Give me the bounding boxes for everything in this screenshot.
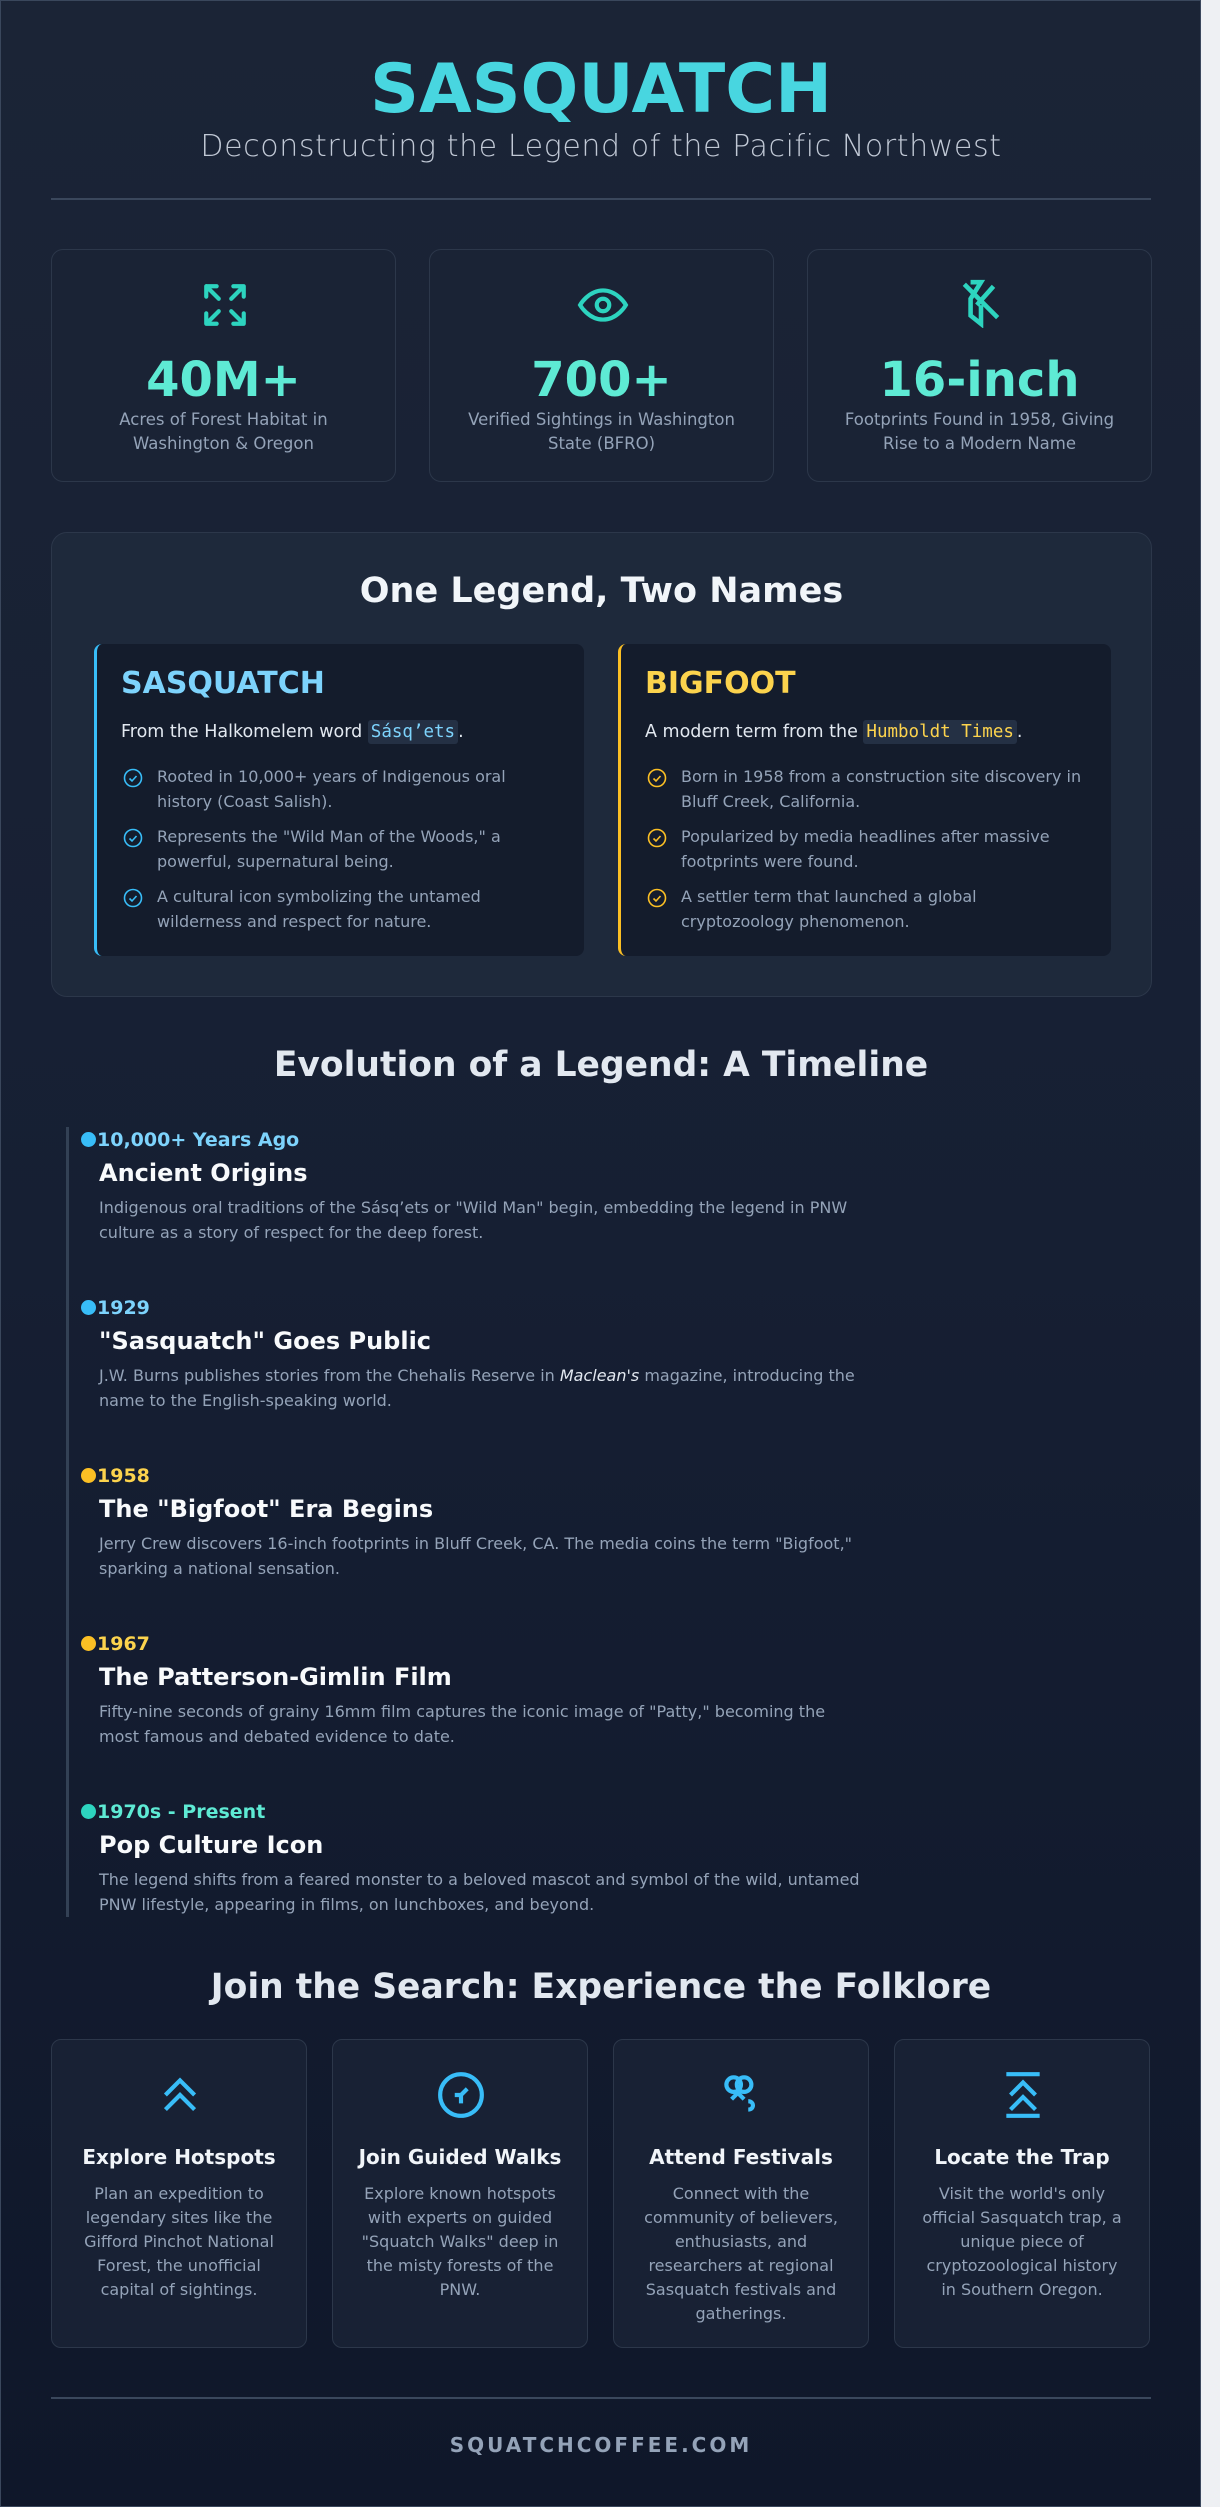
timeline entry 2	[81, 1297, 855, 1410]
bullet: A cultural icon symbolizing the untamed wilderness and respect for nature.	[157, 887, 481, 931]
card: explore hotspots: Plan an expedition to legendary sites like the Gifford Pinchot National Forest, the unofficial capital of sightings.	[84, 2184, 274, 2299]
timeline entry 2: 1929	[97, 1297, 150, 1319]
title: SASQUATCH	[370, 50, 832, 129]
icon: trap	[1006, 2072, 1040, 2118]
card: sasquatch: SASQUATCH	[121, 666, 325, 701]
timeline entry 4: 1967	[97, 1633, 150, 1655]
timeline entry 1	[81, 1129, 847, 1242]
icon: footprint	[962, 280, 1000, 328]
bullet: Represents the "Wild Man of the Woods," a powerful, supernatural being.	[157, 827, 501, 871]
card: trap: Visit the world's only official Sasquatch trap, a unique piece of cryptozoological history in Southern Oregon.	[922, 2184, 1122, 2299]
join heading: Join the Search: Experience the Folklore	[211, 1967, 991, 2007]
timeline entry 2: "Sasquatch" Goes Public	[99, 1327, 431, 1355]
stat card: forest	[51, 249, 396, 482]
stat: 700+: 700+	[531, 352, 672, 408]
icon: chevrons	[164, 2078, 196, 2111]
timeline entry 3: 1958	[97, 1465, 150, 1487]
bullet: Popularized by media headlines after massive footprints were found.	[681, 827, 1050, 871]
timeline entry 3: Jerry Crew discovers 16-inch footprints in Bluff Creek, CA. The media coins the term "Bigfoot," sparking a national sensation.	[99, 1534, 852, 1578]
stat label: Footprints Found in 1958, Giving Rise to a Modern Name	[845, 410, 1114, 453]
footer: SQUATCHCOFFEE.COM	[450, 2433, 752, 2457]
card: trap: Locate the Trap	[934, 2145, 1110, 2169]
stat: 40M+: 40M+	[146, 352, 301, 408]
timeline entry 4	[81, 1633, 825, 1746]
timeline entry 5	[81, 1801, 860, 1914]
card: explore hotspots	[51, 2039, 307, 2348]
stat: 16-inch: 16-inch	[880, 352, 1079, 408]
timeline entry 3	[81, 1465, 852, 1578]
icon: people	[724, 2075, 755, 2112]
card: guided walks	[332, 2039, 588, 2348]
stat card: footprints	[807, 249, 1152, 482]
bullet: Rooted in 10,000+ years of Indigenous oral history (Coast Salish).	[157, 767, 506, 811]
icon: compass	[438, 2072, 484, 2118]
stat card: sightings	[429, 249, 774, 482]
card: bigfoot: A modern term from the Humboldt Times.	[645, 722, 1022, 742]
timeline entry 1: Ancient Origins	[99, 1159, 308, 1187]
stat label: Verified Sightings in Washington State (BFRO)	[468, 410, 735, 453]
card: bigfoot	[618, 644, 1111, 956]
card: bigfoot: BIGFOOT	[645, 666, 796, 701]
card: festivals	[613, 2039, 869, 2348]
timeline entry 5: 1970s - Present	[97, 1801, 265, 1823]
card: explore hotspots: Explore Hotspots	[82, 2145, 276, 2169]
card: guided walks: Join Guided Walks	[359, 2145, 561, 2169]
stat label: Acres of Forest Habitat in Washington & Oregon	[119, 410, 328, 453]
card: guided walks: Explore known hotspots with experts on guided "Squatch Walks" deep in the misty forests of the PNW.	[362, 2184, 558, 2299]
card: trap	[894, 2039, 1150, 2348]
timeline entry 3: The "Bigfoot" Era Begins	[99, 1495, 433, 1523]
timeline entry 4: Fifty-nine seconds of grainy 16mm film captures the iconic image of "Patty," becoming the most famous and debated evidence to date.	[99, 1702, 825, 1746]
panel: two names	[51, 532, 1152, 997]
timeline entry 5: Pop Culture Icon	[99, 1831, 323, 1859]
card: festivals: Connect with the community of believers, enthusiasts, and researchers at regional Sasquatch festivals and gatherings.	[644, 2184, 838, 2323]
icon: expand	[204, 284, 246, 326]
timeline entry 1: 10,000+ Years Ago	[97, 1129, 299, 1151]
timeline entry 4: The Patterson-Gimlin Film	[99, 1663, 452, 1691]
card: sasquatch: From the Halkomelem word Sásq’ets.	[121, 722, 464, 742]
timeline entry 1: Indigenous oral traditions of the Sásq’ets or "Wild Man" begin, embedding the legend in PNW culture as a story of respect for the deep forest.	[99, 1198, 847, 1242]
card: sasquatch	[94, 644, 584, 956]
card: festivals: Attend Festivals	[649, 2145, 833, 2169]
timeline entry 2: J.W. Burns publishes stories from the Chehalis Reserve in Maclean's magazine, introducing the name to the English-speaking world.	[99, 1366, 855, 1410]
timeline entry 5: The legend shifts from a feared monster to a beloved mascot and symbol of the wild, untamed PNW lifestyle, appearing in films, on lunchboxes, and beyond.	[99, 1870, 860, 1914]
subtitle: Deconstructing the Legend of the Pacific Northwest	[200, 129, 1002, 164]
bullet: Born in 1958 from a construction site discovery in Bluff Creek, California.	[681, 767, 1081, 811]
timeline heading: Evolution of a Legend: A Timeline	[274, 1045, 928, 1085]
icon: eye	[578, 288, 628, 322]
bullet: A settler term that launched a global cryptozoology phenomenon.	[681, 887, 977, 931]
heading: One Legend, Two Names	[360, 571, 843, 611]
